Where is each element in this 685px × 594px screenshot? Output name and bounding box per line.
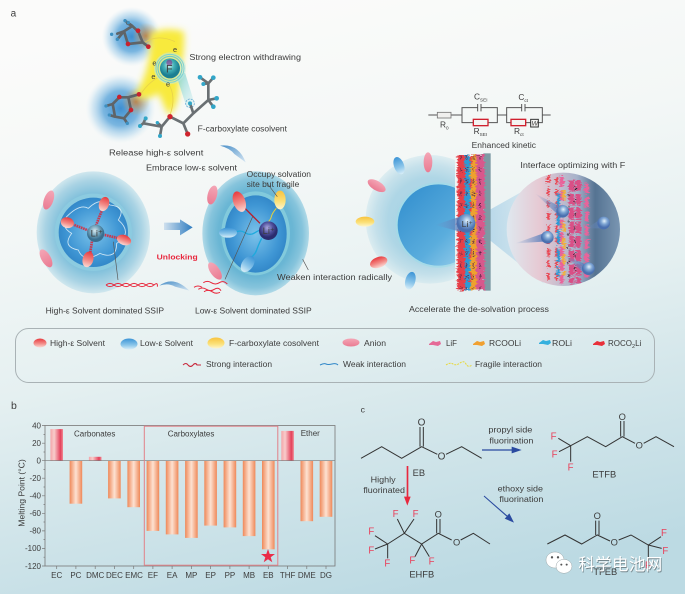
caption: accelerate de-solvation: Accelerate the de-solvation process [409, 304, 549, 314]
solvents around half sphere [356, 152, 432, 291]
category labels: EC [51, 571, 62, 580]
molecule ETFB: O [636, 440, 643, 450]
y axis tick labels: 20 [32, 439, 42, 448]
y axis tick labels: -100 [25, 544, 42, 553]
equivalent circuit: C [474, 91, 480, 101]
bars [50, 429, 332, 549]
legend: low-e solvent: Low-ε Solvent [140, 339, 194, 348]
category labels: THF [280, 571, 295, 580]
curved arrow: release to embrace [220, 145, 246, 162]
category labels [51, 571, 332, 580]
equivalent circuit: SEI [480, 132, 487, 137]
star marker [261, 549, 275, 562]
high-e solvent [230, 190, 249, 214]
caption: occupy solvation site: Occupy solvation [247, 170, 311, 179]
caption: release high-e solvent: Release high-ε solvent [109, 148, 204, 158]
watermark: chat icon [546, 552, 572, 573]
legend: F-carboxylate cosolvent: F-carboxylate cosolvent [229, 339, 320, 348]
strong bonds to high-e solvents [70, 207, 123, 258]
legend: high-e solvent: High-ε Solvent [50, 339, 106, 348]
category labels: PC [70, 571, 82, 580]
category labels: EMC [125, 571, 143, 580]
F-carboxylate solvent [274, 191, 286, 209]
equivalent circuit: ct [520, 132, 524, 137]
Li+ ion [87, 225, 104, 242]
caption: interface optimizing: Interface optimizing with F [520, 160, 625, 170]
leader lines [225, 183, 308, 279]
Li+ ion [259, 221, 278, 240]
equivalent circuit: 0 [446, 125, 449, 130]
legend: LiF [429, 339, 457, 348]
caption: highly fluorinated: Highly [371, 474, 397, 484]
y axis tick labels: -120 [25, 562, 42, 571]
molecular cluster with F atom [86, 7, 219, 143]
label a: a [11, 9, 17, 20]
caption: embrace low-e solvent: Embrace low-ε solvent [146, 162, 238, 172]
high-e solvent dominated sphere [37, 171, 150, 293]
SEI layer [457, 155, 485, 290]
molecule EB: EB [413, 468, 425, 478]
caption: highly fluorinated: fluorinated [363, 485, 405, 495]
legend: RCOOLi [473, 339, 521, 348]
caption: F-carboxylate cosolvent: F-carboxylate cosolvent [198, 125, 288, 134]
strong interaction wave [106, 283, 157, 287]
equivalent circuit: ct [524, 98, 529, 103]
caption: occupy solvation site: site but fragile [247, 180, 300, 189]
molecule EHFB: EHFB [409, 570, 434, 580]
magnified interface circle [507, 173, 620, 286]
cone to magnified view [483, 174, 553, 283]
anions [37, 189, 56, 269]
category labels: DME [298, 571, 316, 580]
electron labels [151, 45, 177, 88]
category labels: EA [167, 571, 178, 580]
arrow: highly fluorinated [404, 466, 411, 506]
category labels: EF [148, 571, 158, 580]
arrow: ethoxy side [484, 496, 514, 523]
electron labels: e [152, 59, 156, 68]
legend: RCOOLi: RCOOLi [489, 339, 521, 348]
legend: fragile interaction [446, 360, 542, 369]
molecule TFEB: TFEB [593, 567, 617, 577]
caption: ethoxy side fluorination [498, 483, 544, 504]
equivalent circuit: SEI [480, 97, 488, 102]
molecule EB: O [438, 452, 446, 463]
legend: weak interaction: Weak interaction [343, 360, 406, 369]
watermark: text: 科学电池网 [579, 552, 663, 576]
equivalent circuit: W [532, 121, 539, 128]
desolvating half sphere [356, 152, 455, 290]
molecule EHFB: F [409, 556, 415, 567]
caption: ethoxy side fluorination: fluorination [499, 494, 544, 504]
y axis tick labels: 0 [37, 456, 42, 466]
legend: low-e solvent [120, 338, 194, 350]
molecule EHFB: F [393, 509, 399, 520]
molecule EHFB: F [368, 546, 374, 557]
panel c: fluorination chemistry [361, 404, 674, 580]
caption: enhanced kinetic: Enhanced kinetic [472, 141, 536, 150]
legend: ROCO2Li: ROCO [608, 339, 632, 348]
molecule EHFB: F [429, 556, 435, 567]
category labels: MB [243, 571, 255, 580]
label c: c [361, 404, 366, 414]
panel a: solvation illustration, left half [11, 7, 312, 316]
caption: strong electron withdrawing: Strong electron withdrawing [189, 52, 301, 62]
category labels: EP [205, 571, 216, 580]
category labels: MP [185, 571, 197, 580]
group labels: Carboxylates [168, 430, 214, 438]
y axis tick labels: 40 [32, 422, 42, 430]
Li+ crossing interface [435, 214, 475, 233]
y axis tick labels [25, 422, 42, 571]
unlocking label: Unlocking [157, 253, 198, 262]
legend: ROCO2Li: 2 [632, 344, 635, 350]
electron labels: e [151, 72, 155, 81]
group labels [74, 429, 320, 438]
caption: ethoxy side fluorination: ethoxy side [498, 483, 543, 493]
carboxylates highlight box [144, 426, 278, 565]
molecule EHFB: O [435, 510, 442, 520]
legend frame [16, 328, 654, 382]
watermark: text: 科学电池网 [578, 551, 662, 575]
low-e solvent dominated sphere: Li⁺ [263, 226, 275, 236]
molecule TFEB: F [662, 546, 668, 557]
category labels: EB [263, 571, 274, 580]
leader line to strong interaction [113, 242, 118, 280]
current collector bar [483, 153, 491, 291]
y axis tick labels: -40 [29, 492, 42, 501]
y axis tick labels: -20 [29, 474, 42, 483]
low-e solvent dominated sphere [202, 171, 309, 295]
molecule ETFB [551, 412, 674, 480]
caption: high-e SSIP: High-ε Solvent dominated SSIP [46, 307, 164, 316]
legend: LiF: LiF [446, 339, 457, 348]
molecule ETFB: F [552, 449, 558, 460]
electron labels: e [173, 45, 177, 54]
high-e solvent dominated sphere: Li⁺ [91, 229, 103, 239]
label b: b [11, 400, 17, 412]
legend: ROLi: ROLi [552, 339, 572, 348]
legend: weak interaction [320, 360, 406, 369]
equivalent circuit: C [518, 92, 524, 102]
y axis tick labels: -60 [29, 509, 42, 518]
Li+ crossing interface: Li⁺ [462, 219, 473, 229]
lithium ion droplets [515, 193, 610, 275]
curved arrow: high to low [159, 281, 189, 291]
molecule ETFB: F [568, 462, 574, 473]
caption: highly fluorinated [363, 474, 405, 495]
magnified SEI flakes [548, 177, 587, 283]
molecule EHFB: O [453, 538, 460, 548]
molecule TFEB: F [645, 560, 651, 571]
molecule EHFB: F [384, 558, 390, 569]
equivalent circuit: R [514, 126, 520, 136]
equivalent circuit: R [440, 119, 446, 129]
low-e solvents [219, 228, 257, 275]
molecule ETFB: ETFB [592, 470, 616, 480]
molecule TFEB [547, 511, 668, 577]
arrow: propyl side [482, 447, 522, 453]
electron labels: e [166, 79, 170, 88]
legend: anion [342, 338, 386, 348]
legend: F-carboxylate cosolvent [208, 338, 320, 348]
legend: fragile interaction: Fragile interaction [475, 360, 542, 369]
legend: ROLi [539, 339, 572, 348]
caption: propyl side fluorination: propyl side [488, 425, 533, 435]
y axis title: Melting Point (°C) [16, 459, 26, 527]
legend: ROCO2Li [593, 339, 642, 350]
plot area frame [45, 426, 335, 566]
legend: high-e solvent [34, 338, 106, 348]
legend panel [16, 328, 654, 382]
molecule TFEB: F [661, 528, 667, 539]
anions [205, 184, 225, 282]
electron transfer lines [140, 38, 175, 115]
big right arrow [164, 219, 193, 235]
molecule EHFB: F [413, 509, 419, 520]
y axis tick labels: -80 [29, 527, 42, 536]
strong interaction wave, right [194, 281, 227, 293]
caption: propyl side fluorination [488, 425, 534, 445]
caption: occupy solvation site [247, 170, 311, 189]
category labels: DG [320, 571, 332, 580]
legend: ROCO2Li: Li [635, 339, 642, 348]
molecule ETFB: F [551, 431, 557, 442]
panel b: melting point bar chart [11, 400, 335, 580]
panel a: interface illustration, right half [356, 91, 625, 314]
molecule ETFB: O [619, 412, 626, 422]
molecule EHFB: F [368, 526, 374, 537]
solvent molecule bottom [104, 92, 141, 125]
group labels: Carbonates [74, 430, 115, 438]
molecule TFEB: O [611, 538, 618, 548]
zero line and ticks [42, 426, 335, 569]
legend: strong interaction: Strong interaction [206, 360, 272, 369]
molecule EB [361, 418, 482, 478]
molecule TFEB: O [594, 511, 601, 521]
F-carboxylate molecule [138, 75, 219, 138]
group labels: Ether [301, 429, 320, 438]
equivalent circuit [428, 91, 551, 137]
high-e solvents [60, 195, 133, 268]
white tangled lines [64, 202, 125, 258]
solvent molecule top [110, 19, 151, 49]
molecule EHFB [368, 509, 490, 580]
molecule EB: O [418, 418, 426, 429]
legend: anion: Anion [364, 339, 386, 348]
caption: low-e SSIP: Low-ε Solvent dominated SSIP [195, 307, 312, 316]
equivalent circuit: R [474, 126, 480, 136]
bonds [245, 208, 260, 223]
F atom with rings: F [166, 64, 173, 76]
category labels: DEC [106, 571, 123, 580]
category labels: PP [225, 571, 235, 580]
category labels: DMC [86, 571, 105, 580]
caption: propyl side fluorination: fluorination [489, 435, 534, 445]
caption: weaken interaction radically: Weaken interaction radically [277, 272, 393, 282]
solvent electron clouds [86, 7, 184, 143]
